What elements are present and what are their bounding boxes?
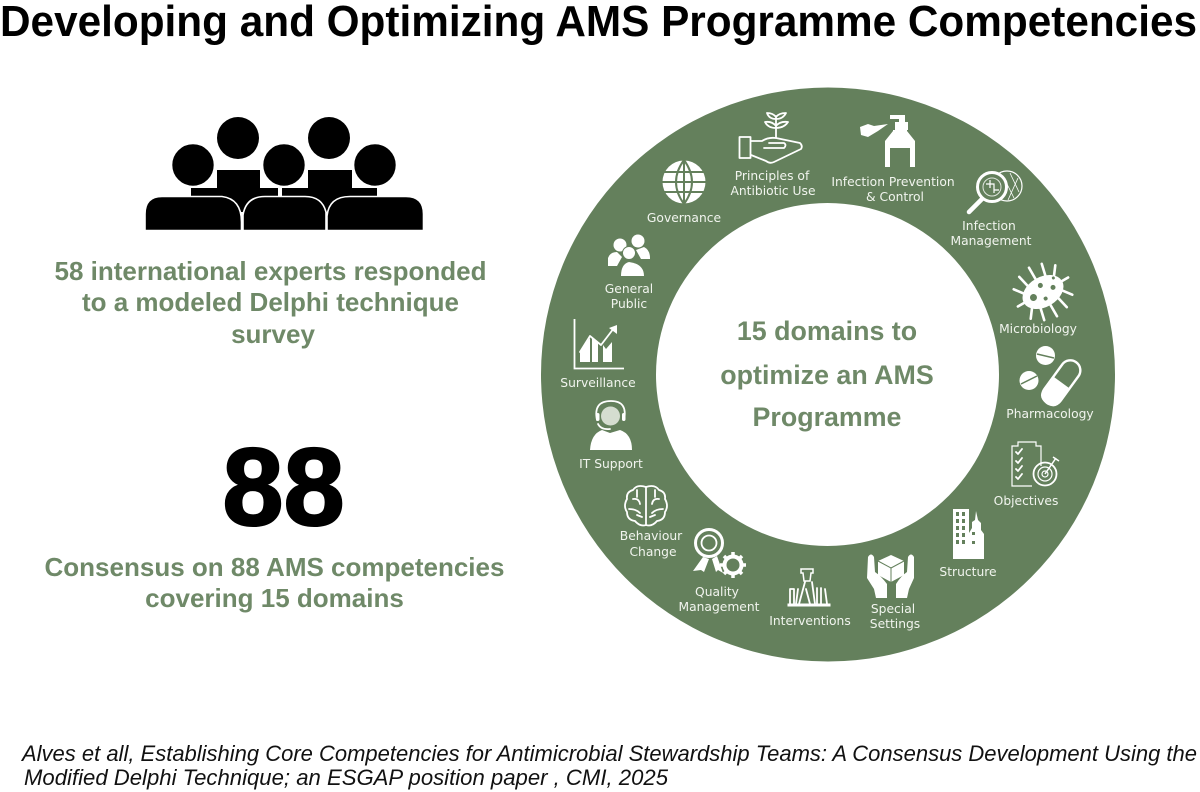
citation: Alves et all, Establishing Core Competencies for Antimicrobial Stewardship Teams: A Consensus Development Using the [20, 741, 1197, 766]
domain: General Public [605, 234, 653, 311]
icon: group of people [145, 117, 424, 230]
domain: Infection Prevention and Control: & Control [866, 190, 924, 204]
text: consensus [45, 552, 504, 613]
domain: General Public: Public [611, 297, 647, 311]
domain: Infection Prevention and Control: Infection Prevention [831, 175, 955, 189]
domain: Structure: Structure [939, 565, 997, 579]
domain: Infection Management [950, 171, 1032, 248]
domain: IT Support: IT Support [579, 457, 643, 471]
domain: Quality Management [678, 530, 760, 614]
domain: Principles of Antibiotic Use [730, 113, 816, 198]
domain: General Public: General [605, 282, 653, 296]
big number 88: 88 [222, 426, 345, 549]
domain: Principles of Antibiotic Use: Antibiotic Use [730, 184, 816, 198]
domain: Special Settings: Settings [870, 617, 920, 631]
domain: Interventions: Interventions [769, 614, 851, 628]
domain: Special Settings: Special [871, 602, 915, 616]
domain: Quality Management: Management [678, 600, 760, 614]
text: experts [54, 256, 487, 349]
domain: Objectives: Objectives [994, 494, 1058, 508]
domain: Infection Management: Infection [962, 219, 1016, 233]
domain: Governance: Governance [647, 211, 721, 225]
domain: Interventions [769, 569, 851, 628]
domain: Surveillance: Surveillance [560, 376, 636, 390]
domain: Behaviour Change [620, 486, 683, 559]
domain: Infection Management: Management [950, 234, 1032, 248]
domain: Special Settings [867, 554, 920, 631]
centre text: Programme [753, 402, 901, 432]
domain: Surveillance [560, 319, 636, 390]
text: experts: to a modeled Delphi technique [82, 287, 459, 317]
domain: IT Support [579, 401, 643, 471]
text: consensus: Consensus on 88 AMS competencies [45, 552, 504, 582]
domain: Governance [647, 160, 721, 225]
text: experts: 58 international experts responded [54, 256, 487, 286]
centre text: optimize an AMS [720, 360, 934, 390]
domain: Infection Prevention and Control [831, 115, 955, 204]
centre text [720, 316, 934, 432]
domain: Behaviour Change: Behaviour [620, 529, 683, 543]
centre text: 15 domains to [737, 316, 917, 346]
text: consensus: covering 15 domains [145, 583, 404, 613]
domain: Microbiology [999, 253, 1082, 336]
domain: Pharmacology: Pharmacology [1006, 407, 1094, 421]
domain: Behaviour Change: Change [629, 545, 677, 559]
domain: Objectives [994, 442, 1059, 508]
domain: Pharmacology [1006, 346, 1094, 421]
citation: Modified Delphi Technique; an ESGAP position paper , CMI, 2025 [24, 765, 669, 790]
domain: Structure [939, 509, 997, 579]
domain: Microbiology: Microbiology [999, 322, 1077, 336]
domain ring [541, 88, 1115, 662]
domain: Principles of Antibiotic Use: Principles of [735, 169, 810, 183]
text: experts: survey [231, 319, 315, 349]
domain: Quality Management: Quality [695, 585, 739, 599]
citation [20, 741, 1197, 790]
